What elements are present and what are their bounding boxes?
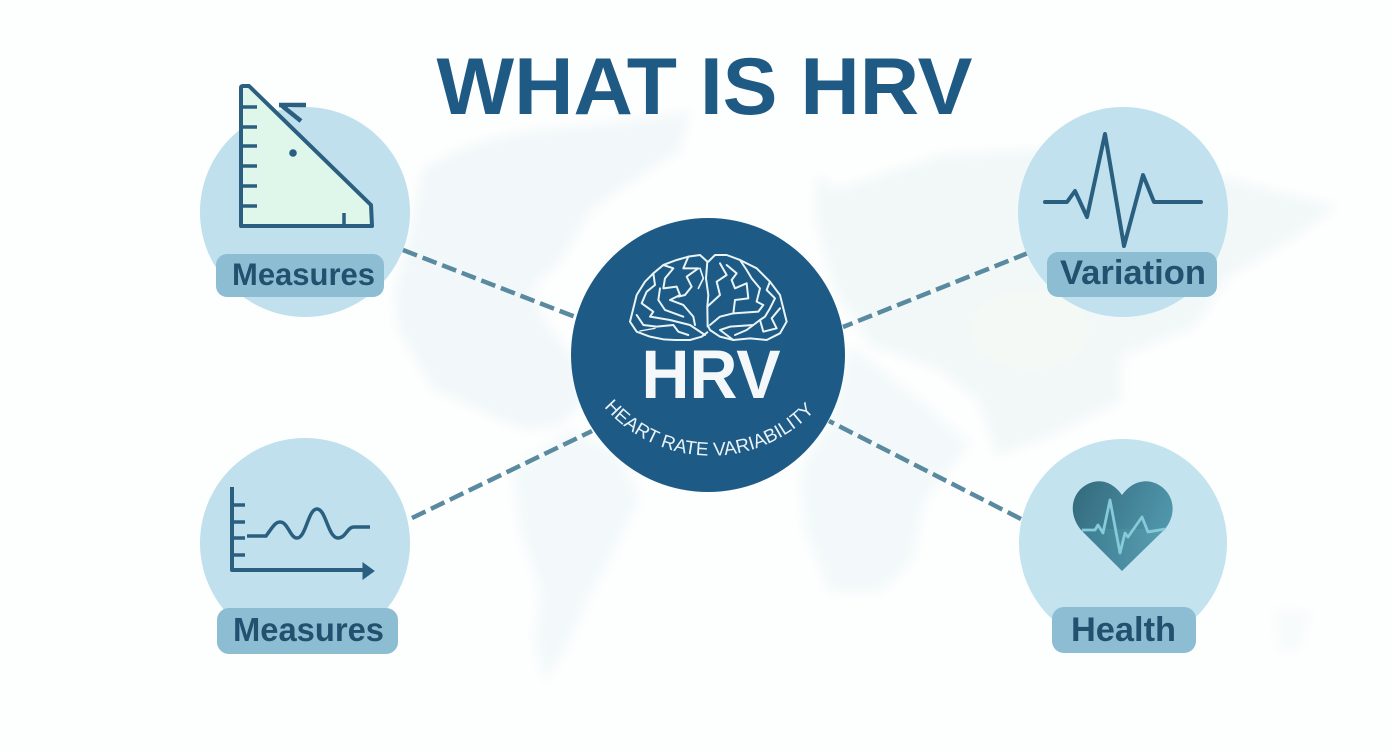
- circle: [200, 107, 410, 317]
- icon: brain: [630, 255, 787, 340]
- icon: set square ruler: [241, 86, 372, 226]
- label pill: Measures: [233, 611, 384, 648]
- icon: pulse line: [1045, 134, 1201, 246]
- panel: central HRV badge: [571, 218, 845, 492]
- dashed connector: bottom left: [412, 431, 592, 518]
- label pill: [1052, 607, 1196, 653]
- label pill: Measures: [232, 256, 375, 292]
- panel: bottom right health: [1019, 439, 1227, 653]
- HRV heading: HRV: [642, 336, 780, 413]
- label pill: Health: [1071, 611, 1176, 649]
- circle: [200, 438, 410, 648]
- icon: heart with pulse: [1073, 481, 1173, 571]
- dashed connector: bottom right: [829, 421, 1021, 519]
- panel: top right variation: [1018, 107, 1228, 317]
- circle: [1019, 439, 1227, 647]
- dashed connector: top right: [843, 253, 1028, 327]
- icon: line chart: [232, 487, 374, 579]
- circle: [571, 218, 845, 492]
- label pill: Variation: [1060, 254, 1206, 292]
- title: WHAT IS HRV: [436, 42, 972, 132]
- circle: [1018, 107, 1228, 317]
- dashed connector: top left: [403, 250, 578, 318]
- label pill: [217, 608, 398, 654]
- panel: bottom left measures: [200, 438, 410, 654]
- panel: top left measures: [200, 86, 410, 317]
- world map backdrop: [395, 112, 1336, 682]
- curved subtitle: HEART RATE VARIABILITY: [605, 399, 811, 456]
